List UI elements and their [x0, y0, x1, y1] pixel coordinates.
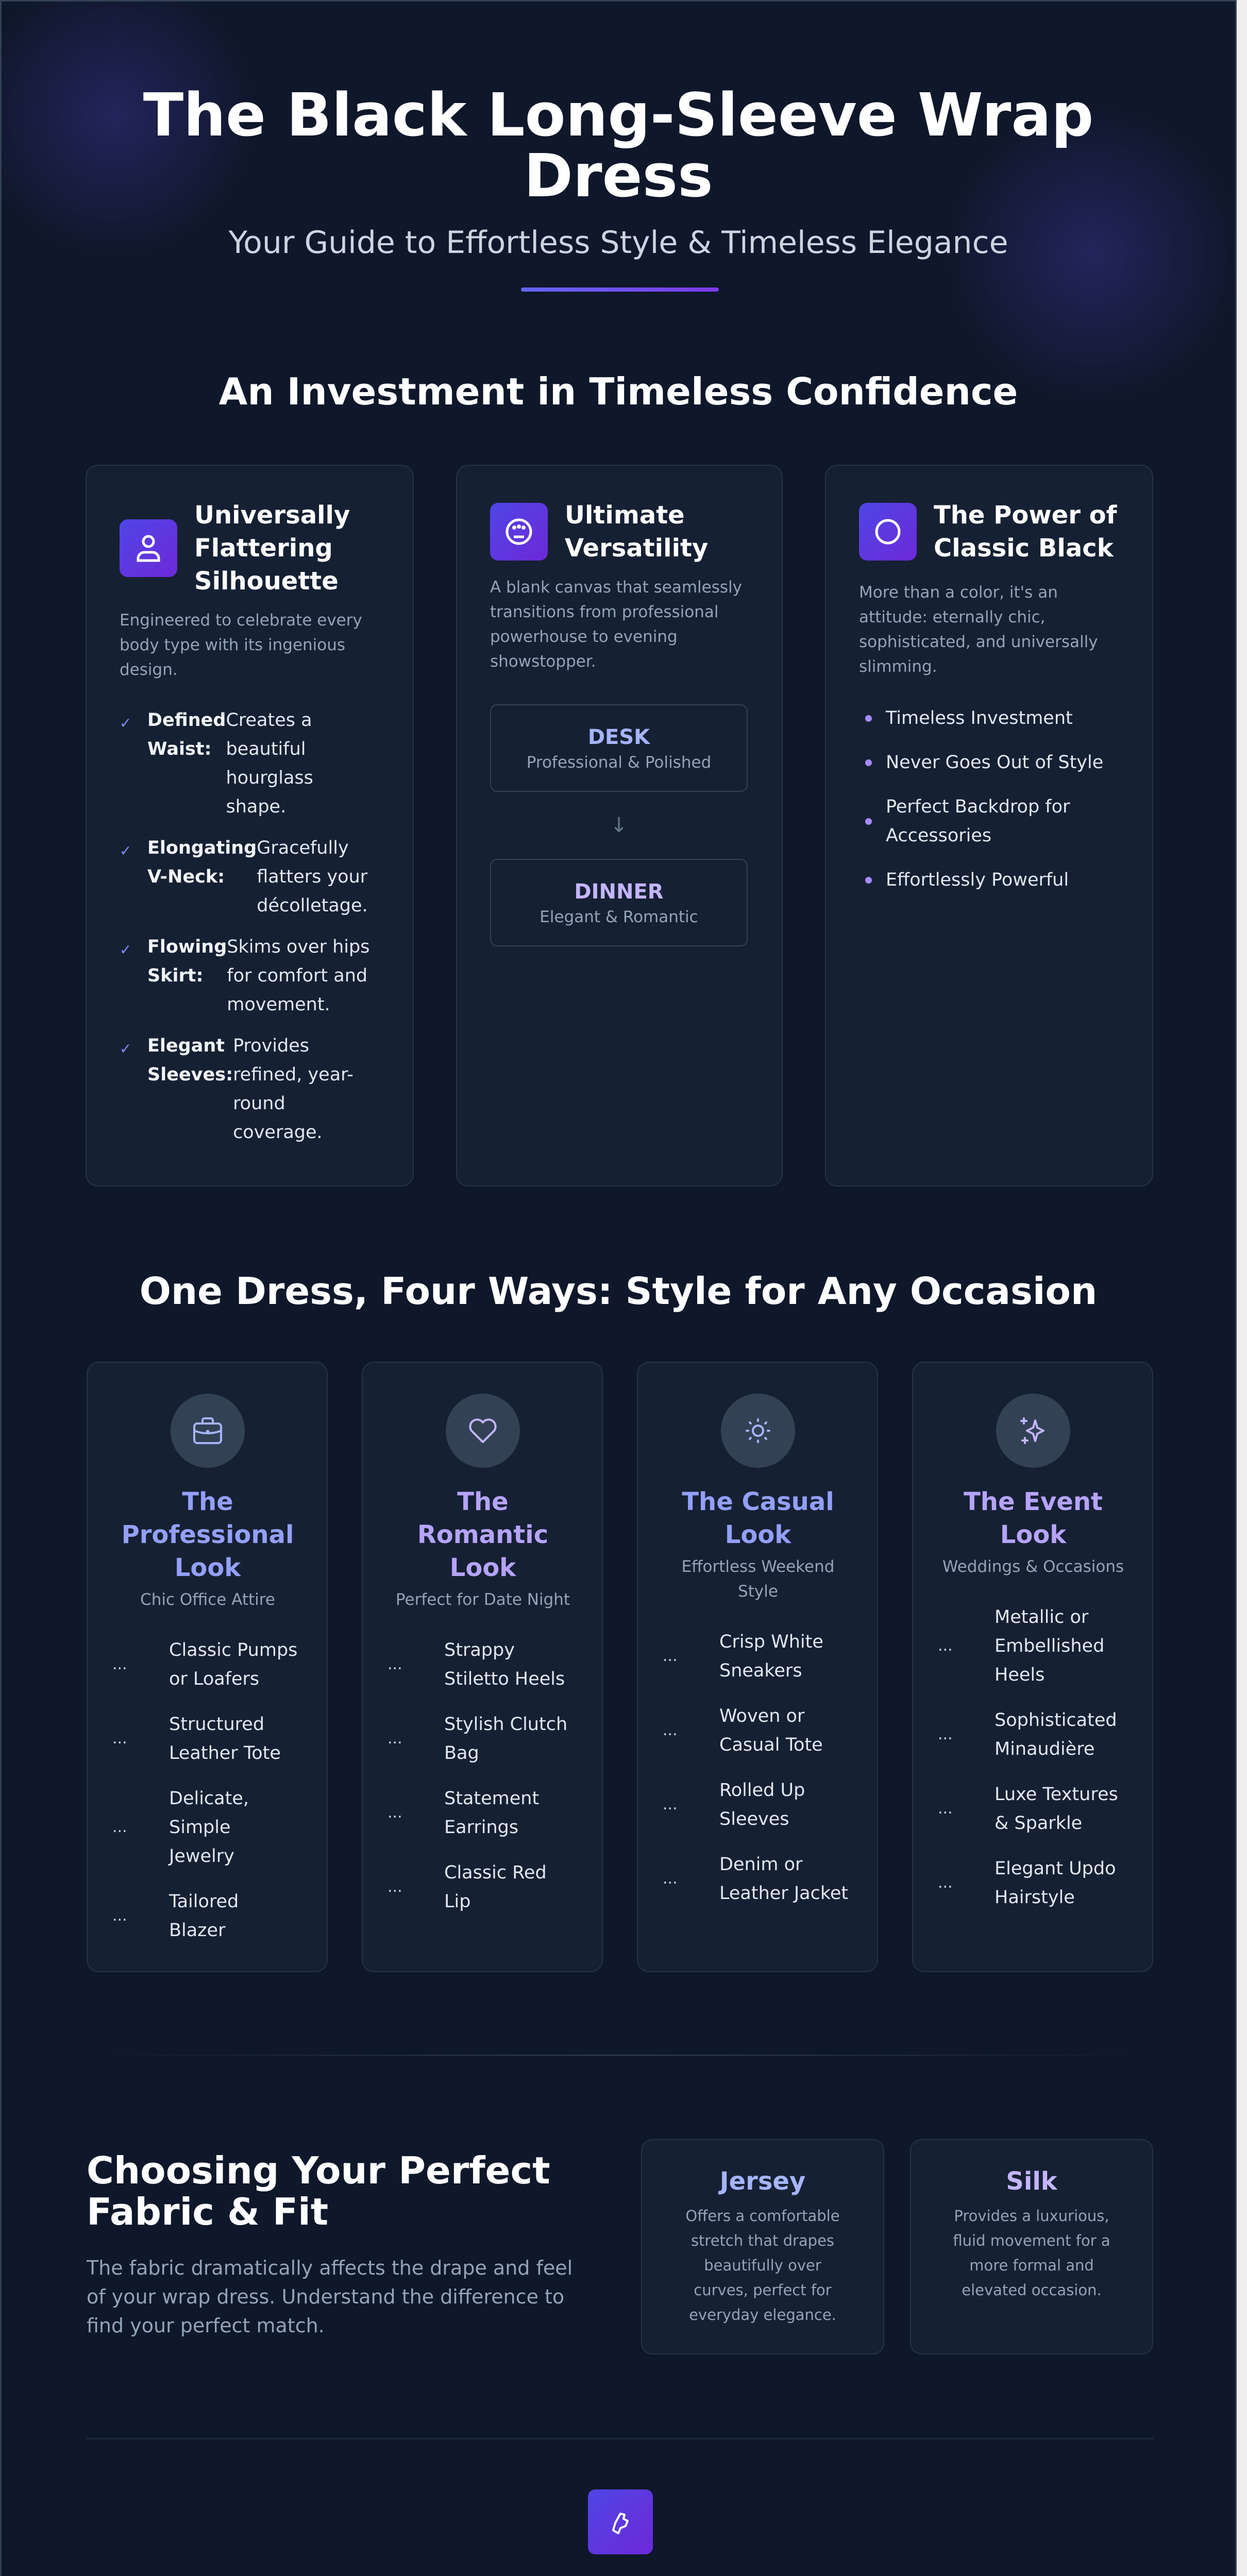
icon: hand: [588, 2489, 653, 2554]
list: ...: [387, 1730, 402, 1748]
panel: romantic look: Perfect for Date Night: [396, 1590, 570, 1609]
card header: Versatility: [565, 534, 708, 563]
panel: event look: Weddings & Occasions: [942, 1557, 1124, 1576]
icon: briefcase: [171, 1394, 245, 1468]
title: The Black Long-Sleeve Wrap: [143, 81, 1093, 150]
description: Engineered to celebrate every body type with its ingenious design.: [120, 611, 362, 679]
icon: sparkles: [996, 1394, 1070, 1468]
fabric intro text: of your wrap dress. Understand the difference to: [87, 2285, 564, 2308]
card: jersey: [641, 2139, 884, 2354]
list: Woven or Casual Tote: [719, 1706, 823, 1755]
bullet list: Timeless Investment: [886, 708, 1073, 728]
list: ...: [112, 1818, 127, 1836]
list: ...: [663, 1647, 678, 1665]
bullet list: Effortlessly Powerful: [886, 870, 1069, 890]
subtitle: Your Guide to Effortless Style & Timeless Elegance: [229, 225, 1008, 261]
heading: fabric: [87, 2149, 550, 2233]
description: More than a color, it's an attitude: eternally chic, sophisticated, and universally slimming.: [859, 583, 1098, 676]
list: [663, 1632, 848, 1904]
panel: casual look: Effortless Weekend: [682, 1557, 834, 1576]
panel: romantic look: [362, 1362, 603, 1972]
list: ...: [663, 1870, 678, 1888]
title: Dress: [524, 142, 713, 211]
list: Metallic or Embellished Heels: [995, 1607, 1104, 1685]
list: [387, 1640, 567, 1912]
list: Delicate, Simple Jewelry: [169, 1788, 249, 1867]
card: silk: Provides a luxurious, fluid movement for a more formal and elevated occasion.: [953, 2207, 1110, 2299]
card header: [490, 501, 708, 563]
card: silk: [910, 2139, 1153, 2354]
bullet list: [865, 708, 1103, 890]
list: Tailored Blazer: [169, 1891, 239, 1941]
card header: Flattering: [194, 534, 333, 563]
title underline bar: [521, 287, 719, 292]
icon: face: [490, 503, 548, 561]
title: [143, 81, 1093, 211]
card header: Universally: [194, 501, 350, 530]
feature list: ✓: [120, 941, 131, 958]
list: [938, 1607, 1118, 1908]
feature list: [120, 710, 369, 1143]
bullet list: Never Goes Out of Style: [886, 752, 1103, 773]
card header: Silhouette: [194, 567, 339, 596]
panel: classic black: [825, 465, 1153, 1187]
panel: casual look: The Casual: [682, 1487, 834, 1516]
feature list: Gracefully flatters your décolletage.: [257, 838, 368, 916]
list: Sophisticated Minaudière: [995, 1710, 1117, 1759]
panel: casual look: [637, 1362, 878, 1972]
icon: person: [120, 519, 177, 577]
heading: four ways: One Dress, Four Ways: Style for Any Occasion: [140, 1269, 1097, 1313]
icon: sun: [721, 1394, 795, 1468]
list: Luxe Textures & Sparkle: [995, 1784, 1118, 1834]
panel: event look: The Event: [964, 1487, 1103, 1516]
feature list: ✓: [120, 842, 131, 859]
list: ...: [112, 1655, 127, 1673]
panel: professional look: Look: [175, 1553, 241, 1582]
list: ...: [387, 1804, 402, 1822]
feature list: ✓: [120, 715, 131, 732]
list: Denim or Leather Jacket: [719, 1854, 848, 1904]
feature list: Provides refined, year-round coverage.: [233, 1036, 353, 1143]
fabric intro text: The fabric dramatically affects the drape and feel: [87, 2257, 572, 2279]
dinner box: DINNER: [574, 880, 664, 904]
feature list: Elongating V-Neck:: [147, 838, 257, 887]
desk box: DESK: [588, 725, 650, 749]
description: A blank canvas that seamlessly transitions from professional powerhouse to evening showstopper.: [490, 578, 742, 671]
panel: casual look: Look: [725, 1520, 791, 1549]
list: ...: [938, 1725, 953, 1743]
dinner box: [490, 859, 748, 946]
card header: Classic Black: [934, 534, 1114, 563]
panel: professional look: [87, 1362, 328, 1972]
list: Classic Pumps or Loafers: [169, 1640, 297, 1689]
list: Rolled Up Sleeves: [719, 1780, 805, 1829]
card: silk: Silk: [1006, 2167, 1057, 2196]
panel: event look: [912, 1362, 1153, 1972]
panel: flattering silhouette: [86, 465, 414, 1187]
list: Statement Earrings: [444, 1788, 539, 1838]
list: Crisp White Sneakers: [719, 1632, 823, 1681]
card: jersey: Jersey: [720, 2167, 805, 2196]
list: ...: [938, 1874, 953, 1892]
panel: professional look: Professional: [122, 1520, 294, 1549]
feature list: Skims over hips for comfort and movement.: [227, 937, 369, 1015]
card: jersey: Offers a comfortable stretch that drapes beautifully over curves, perfect for everyday elegance.: [685, 2207, 840, 2324]
list: Elegant Updo Hairstyle: [995, 1858, 1116, 1908]
desk box: [490, 704, 748, 792]
card header: Ultimate: [565, 501, 685, 530]
list: ...: [663, 1795, 678, 1814]
card header: [859, 501, 1117, 563]
panel: versatility: [456, 465, 783, 1187]
list: Structured Leather Tote: [169, 1714, 281, 1764]
panel: romantic look: Romantic: [417, 1520, 548, 1549]
feature list: Defined Waist:: [147, 710, 226, 759]
list: ...: [387, 1655, 402, 1673]
icon: heart: [446, 1394, 520, 1468]
list: Classic Red Lip: [444, 1862, 547, 1912]
list: ...: [663, 1721, 678, 1739]
panel: professional look: Chic Office Attire: [140, 1590, 275, 1609]
list: ...: [387, 1878, 402, 1896]
dinner box: Elegant & Romantic: [540, 908, 698, 926]
panel: casual look: Style: [738, 1582, 778, 1601]
list: ...: [938, 1800, 953, 1818]
desk box: Professional & Polished: [527, 753, 711, 772]
list: ...: [112, 1730, 127, 1748]
heading: fabric: Fabric & Fit: [87, 2190, 328, 2233]
icon: circle: [859, 503, 917, 561]
card header: [120, 501, 350, 596]
arrow: ↓: [610, 814, 628, 837]
feature list: Flowing Skirt:: [147, 937, 227, 986]
list: ...: [938, 1637, 953, 1655]
list: Strappy Stiletto Heels: [444, 1640, 565, 1689]
fabric intro text: [87, 2257, 572, 2337]
fabric intro text: find your perfect match.: [87, 2314, 325, 2337]
panel: romantic look: The: [457, 1487, 509, 1516]
list: [112, 1640, 297, 1941]
panel: event look: Look: [1000, 1520, 1066, 1549]
card header: The Power of: [934, 501, 1117, 530]
bullet list: Perfect Backdrop for Accessories: [886, 796, 1070, 846]
heading: fabric: Choosing Your Perfect: [87, 2149, 550, 2192]
heading: investment: An Investment in Timeless Confidence: [219, 370, 1018, 413]
feature list: Elegant Sleeves:: [147, 1036, 233, 1085]
panel: professional look: The: [182, 1487, 233, 1516]
feature list: ✓: [120, 1040, 131, 1057]
feature list: Creates a beautiful hourglass shape.: [226, 710, 313, 817]
list: Stylish Clutch Bag: [444, 1714, 567, 1764]
panel: romantic look: Look: [450, 1553, 516, 1582]
list: ...: [112, 1907, 127, 1925]
